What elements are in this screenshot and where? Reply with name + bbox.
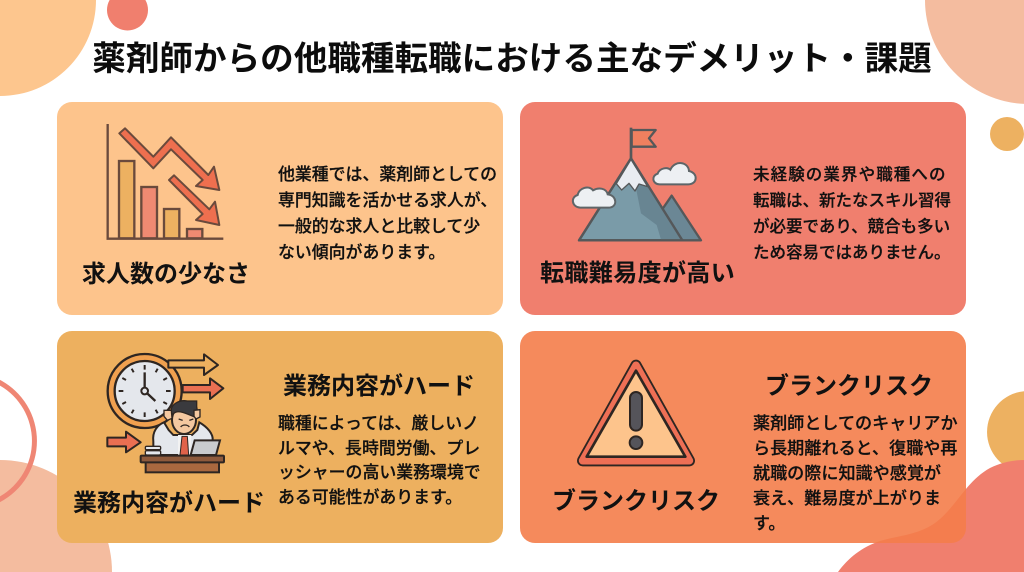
body text: ため容易ではありません。 <box>753 244 951 262</box>
label: ブランクリスク <box>552 488 720 515</box>
panel: 業務内容がハード <box>57 331 503 543</box>
body text: ない傾向があります。 <box>278 243 445 262</box>
body text <box>278 414 481 507</box>
panel: 求人数の少なさ <box>57 102 503 315</box>
heading: ブランクリスク <box>765 373 933 400</box>
body text: ら長期離れると、復職や再 <box>753 439 957 458</box>
body text: 未経験の業界や職種への <box>753 166 947 184</box>
heading: 業務内容がハード <box>283 373 475 400</box>
body text: 職種によっては、厳しいノ <box>278 414 479 433</box>
body text: が必要であり、競合も多い <box>753 218 950 236</box>
body text <box>753 414 958 533</box>
body text: 就職の際に知識や感覚が <box>753 464 941 483</box>
body text: ある可能性があります。 <box>278 488 462 507</box>
body text <box>278 165 497 262</box>
body text: 転職は、新たなスキル習得 <box>753 192 951 210</box>
body text: ルマや、長時間労働、プレ <box>278 439 480 458</box>
body text: ッシャーの高い業務環境で <box>278 463 481 482</box>
body text: 衰え、難易度が上がりま <box>753 489 941 508</box>
icon: stressed worker with clock <box>106 352 225 474</box>
label: 転職難易度が高い <box>540 260 735 287</box>
panel: 転職難易度が高い <box>520 102 966 315</box>
body text: 他業種では、薬剤師としての <box>278 165 497 184</box>
body text: 専門知識を活かせる求人が、 <box>278 191 497 210</box>
panel: ブランクリスク <box>520 331 966 543</box>
icon: mountain with flag <box>572 128 702 242</box>
body text: 一般的な求人と比較して少 <box>278 217 480 236</box>
label: 業務内容がハード <box>73 490 265 517</box>
body text: 薬剤師としてのキャリアか <box>753 414 958 433</box>
icon: falling bar chart <box>106 124 224 240</box>
label: 求人数の少なさ <box>82 261 250 288</box>
body text: す。 <box>753 514 785 533</box>
icon: warning triangle <box>577 360 695 466</box>
title: 薬剤師からの他職種転職における主なデメリット・課題 <box>92 41 932 78</box>
body text <box>753 166 951 262</box>
